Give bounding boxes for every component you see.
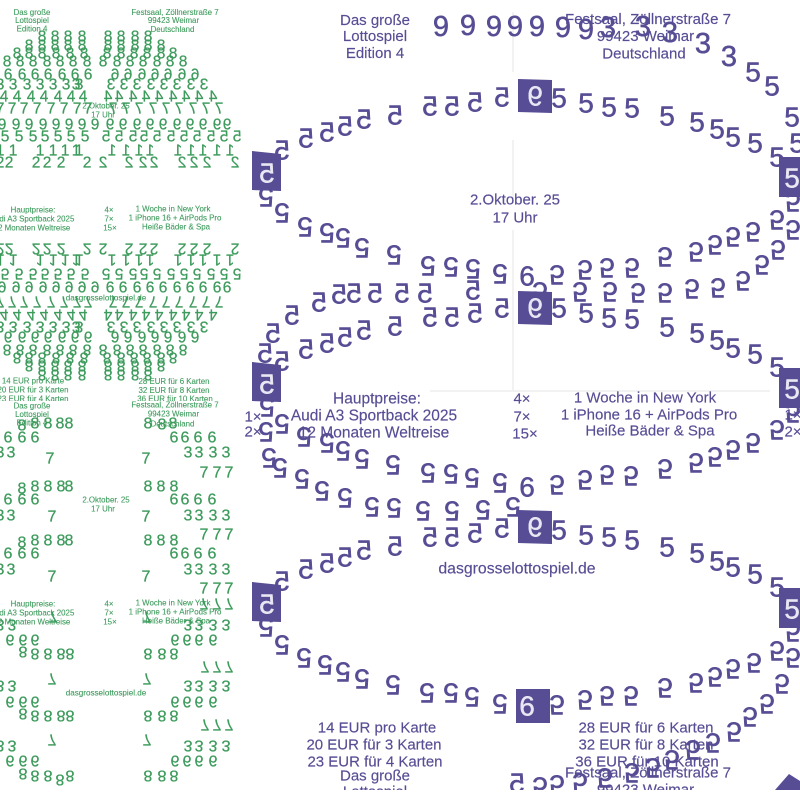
text: green venue xyxy=(131,8,219,34)
icon: cropped diamond box xyxy=(775,774,800,790)
chart: green digit columns, flipped: 77 xyxy=(48,730,152,748)
heading: green title repeat: Das große xyxy=(14,402,51,410)
chart: rotated fives on lower left arcs: 55555555555 xyxy=(258,612,508,720)
text: green ticket prices right xyxy=(137,377,213,404)
chart: green number dome, top left: 88888 xyxy=(25,38,86,54)
text: green ticket prices right: 36 EUR für 10 Karten xyxy=(137,394,213,404)
text: green prize counts: 4× xyxy=(104,206,114,214)
chart: green digit columns, upright: 6666666 xyxy=(4,430,217,446)
chart: green number dome, bottom right: 111111111 xyxy=(108,250,234,268)
text: green date repeat: 17 Uhr xyxy=(91,504,115,514)
chart: green number dome, bottom left: 5555555 xyxy=(1,264,89,282)
text: prize list: 1 iPhone 16 + AirPods Pro xyxy=(561,406,737,424)
chart: green number dome, bottom left: 8888 xyxy=(38,366,86,382)
chart: green digit columns, flipped: 333333 xyxy=(0,616,231,632)
chart: vertically flipped fives on lower right arcs: 555555555555 xyxy=(549,616,800,720)
text: green date: 2.Oktober. 25 xyxy=(82,102,130,110)
text: green venue repeat: Deutschland xyxy=(151,420,194,428)
chart: green number dome, bottom right: 8888888 xyxy=(99,340,187,358)
text: ticket prices left: 20 EUR für 3 Karten xyxy=(306,736,442,754)
heading: title: Das große xyxy=(340,12,410,29)
text: ticket prices right: 28 EUR für 6 Karten xyxy=(578,720,714,736)
chart: top row of nines and threes xyxy=(433,10,737,73)
text: venue repeat, cropped xyxy=(565,764,731,796)
heading: green title: Lottospiel xyxy=(15,16,49,25)
text: edge counts left: 1× xyxy=(244,408,262,426)
text: venue xyxy=(565,11,731,62)
chart: vertically flipped fives on lower right arcs: 555555555555 xyxy=(549,186,800,290)
chart: green number dome, top right: 33333333 xyxy=(107,76,208,94)
text: prize counts: 7× xyxy=(513,408,531,426)
chart: green digit columns, upright: 6666666 xyxy=(4,492,217,508)
chart: green digit columns, flipped: 888 xyxy=(144,644,179,662)
chart: green digit columns, upright: 888 xyxy=(144,416,178,434)
chart: green digit columns, flipped: 6666666 xyxy=(6,630,218,648)
text: ticket prices right: 36 EUR für 10 Karten xyxy=(575,754,719,770)
text: green ticket prices left xyxy=(0,376,69,404)
chart: green digit columns, upright: 88888 xyxy=(18,478,74,498)
heading: green title: Edition 4 xyxy=(17,24,48,34)
text: green prize counts: 15× xyxy=(103,224,117,232)
chart: right number boxes: 555 xyxy=(784,162,800,624)
text: main prizes xyxy=(291,390,457,442)
chart: green number dome, top left: 5555555 xyxy=(1,128,89,146)
chart: green number dome, bottom left: 4444444 xyxy=(0,306,88,322)
chart: green digit columns, upright: 77 xyxy=(48,568,151,586)
chart: green number dome, bottom left: 6666666 xyxy=(4,328,92,344)
chart: green number dome, bottom right: 777777777 xyxy=(109,292,223,310)
chart: vertically flipped fives on lower right arcs: 5555555555 xyxy=(532,234,786,308)
text: green prize list repeat: 1 Woche in New York xyxy=(136,598,210,608)
text: main prizes: Audi A3 Sportback 2025 xyxy=(291,408,457,424)
text: date: 2.Oktober. 25 xyxy=(470,192,560,208)
chart: green digit columns, upright xyxy=(0,416,234,598)
chart: green digit columns, upright: 77 xyxy=(46,450,151,468)
text: green prize list repeat xyxy=(129,598,222,626)
chart: rotated fives on lower left arcs xyxy=(258,182,521,720)
text: venue: Deutschland xyxy=(602,46,686,62)
chart: rotated fives on lower left arcs: 55555555555 xyxy=(259,392,508,498)
chart: green number dome, bottom right: 88888 xyxy=(104,356,165,374)
chart: green number dome, bottom right: 444444444 xyxy=(103,306,217,322)
text: ticket prices left xyxy=(306,720,443,770)
chart: vertically flipped fives on lower right arcs: 55555555555 xyxy=(549,398,800,500)
text: green prize list: 1 Woche in New York xyxy=(136,204,210,214)
text: main prizes: Hauptpreise: xyxy=(333,390,421,408)
chart: green digit columns, flipped: 888 xyxy=(144,766,179,784)
text: green website: dasgrosselottospiel.de xyxy=(66,294,147,302)
chart: green number dome, top left: 8888 xyxy=(38,28,86,46)
chart: green digit columns, flipped: 333333 xyxy=(0,676,231,694)
text: green prize list repeat: 1 iPhone 16 + AirPods Pro xyxy=(129,608,222,616)
chart: green digit columns, upright: 77 xyxy=(48,508,151,526)
chart: green number dome, top right xyxy=(99,28,241,172)
chart: green digit columns, upright: 6666666 xyxy=(4,546,217,562)
chart: green number dome, top left: 4444444 xyxy=(0,88,88,106)
heading: title: Lottospiel xyxy=(343,28,407,45)
text: green venue repeat xyxy=(131,400,219,428)
chart: green digit columns, upright: 888 xyxy=(144,532,179,550)
chart: upright fives on right arcs: 66 xyxy=(519,260,535,502)
heading: title repeat, cropped: Das große xyxy=(340,768,410,784)
chart: mirrored fives on left arcs: 5555555555 xyxy=(274,292,510,376)
text: green main prizes: Hauptpreise: xyxy=(11,206,55,214)
chart: green digit columns, upright: 333333 xyxy=(0,444,231,462)
text: green date repeat: 2.Oktober. 25 xyxy=(82,496,130,504)
text: green prize counts repeat xyxy=(103,600,117,626)
text: green website repeat: dasgrosselottospiel.de xyxy=(66,688,147,698)
chart: mirrored fives on left arcs xyxy=(257,82,525,796)
text: green date: 17 Uhr xyxy=(91,110,115,120)
chart: green number dome, bottom left xyxy=(0,240,99,382)
chart: green number dome, top right: 777777777 xyxy=(109,100,223,118)
text: ticket prices right: 32 EUR für 8 Karten xyxy=(578,736,714,754)
chart: green number dome, bottom left: 99999999 xyxy=(0,278,99,294)
text: venue: Festsaal, Zöllnerstraße 7 xyxy=(565,11,731,28)
text: green venue: 99423 Weimar xyxy=(148,16,199,25)
chart: mirrored fives on left arcs: 5555555555 xyxy=(257,274,481,368)
text: ticket prices left: 23 EUR für 4 Karten xyxy=(307,754,443,770)
heading: title repeat, cropped xyxy=(340,768,410,796)
chart: upright fives on right arcs: 5555555555 xyxy=(551,292,785,382)
chart: green digit columns, upright: 88888 xyxy=(18,416,74,434)
text: green ticket prices right: 28 EUR für 6 Karten xyxy=(138,377,210,386)
chart: upright fives on right arcs: 5555555555 xyxy=(551,514,785,602)
text: green main prizes repeat: Hauptpreise: xyxy=(11,600,55,608)
text: prize list: Heiße Bäder & Spa xyxy=(585,422,715,440)
chart: green number dome, top right: 22222222 xyxy=(99,154,239,172)
chart: centre number boxes: 666 xyxy=(527,80,543,542)
text: green venue repeat: Festsaal, Zöllnerstraße 7 xyxy=(131,400,219,410)
chart: green digit columns, flipped: 777 xyxy=(201,716,234,732)
chart: green digit columns, upright: 777 xyxy=(200,526,234,544)
chart: green number dome, top right: 55555555555 xyxy=(102,128,241,146)
chart: green digit columns, flipped: 333333 xyxy=(0,736,231,754)
chart: green number dome, top right: 111111111 xyxy=(108,142,234,160)
text: green main prizes xyxy=(0,206,75,232)
chart: centre number boxes xyxy=(518,79,552,544)
chart: green digit columns, flipped: 77 xyxy=(48,670,152,686)
text: date: 17 Uhr xyxy=(492,210,538,226)
text: ticket prices left: 14 EUR pro Karte xyxy=(318,720,436,736)
chart: left number boxes: 555 xyxy=(259,158,275,620)
chart: green digit columns, upright: 333333 xyxy=(0,508,231,524)
text: green prize counts repeat: 4× xyxy=(104,600,114,608)
text: edge counts right xyxy=(784,406,800,440)
heading: green title repeat: Lottospiel xyxy=(15,410,49,419)
chart: green number dome, top right: 444444444 xyxy=(103,88,217,106)
chart: green number dome, top left xyxy=(0,28,99,172)
text: date xyxy=(470,192,560,226)
chart: green number dome, top right: 8888888 xyxy=(99,54,187,70)
chart: green digit columns, flipped: 6666666 xyxy=(6,692,218,710)
chart: green digit columns, flipped: 88888 xyxy=(19,704,75,724)
text: prize counts xyxy=(512,390,538,442)
text: prize counts: 4× xyxy=(513,390,531,408)
chart: green number dome, bottom right: 8888 xyxy=(104,366,152,382)
chart: rotated fives on lower left arcs: 55555555555 xyxy=(258,182,508,290)
chart: green digit columns, upright: 888 xyxy=(144,478,179,496)
text: ticket prices right xyxy=(575,720,719,770)
chart: green number dome, top right: 888888 xyxy=(103,46,177,62)
chart: green digit columns, upright: 88888 xyxy=(18,532,74,552)
text: prize counts: 15× xyxy=(512,426,538,442)
chart: green digit columns, flipped: 88888 xyxy=(19,642,75,662)
chart: upright fives on right arcs: 5555555555 xyxy=(551,82,785,172)
chart: green digit columns, flipped: 77 xyxy=(49,608,152,624)
text: green main prizes repeat xyxy=(0,600,75,626)
chart: rotated fives on lower left arcs: 555555555555 xyxy=(258,416,521,526)
chart: green number dome, bottom right: 22222222 xyxy=(99,240,239,256)
text: green prize counts xyxy=(103,206,117,232)
text: edge counts left xyxy=(244,408,262,440)
text: website: dasgrosselottospiel.de xyxy=(438,560,596,578)
text: green prize list: 1 iPhone 16 + AirPods Pro xyxy=(129,214,222,222)
heading: green title xyxy=(14,8,51,34)
chart: bottom number box xyxy=(516,689,550,723)
chart: green digit columns, upright: 777 xyxy=(200,580,234,598)
text: green prize list: Heiße Bäder & Spa xyxy=(142,222,211,232)
chart: green number dome, top left: 99999999 xyxy=(0,116,99,134)
chart: green number dome, bottom right: 6666666 xyxy=(111,328,199,344)
chart: top row of nines and threes: 33333 xyxy=(600,11,737,73)
text: green venue: Festsaal, Zöllnerstraße 7 xyxy=(131,8,219,17)
chart: green digit columns, upright: 777 xyxy=(200,464,234,482)
chart: left number boxes xyxy=(252,151,281,622)
chart: green number dome, top right: 88888 xyxy=(104,38,165,54)
heading: title: Edition 4 xyxy=(346,45,404,62)
chart: green digit columns, flipped: 88888 xyxy=(19,764,75,788)
chart: green digit columns, flipped: 777 xyxy=(201,658,234,674)
chart: green digit columns, upright: 333333 xyxy=(0,562,231,578)
heading: title xyxy=(340,12,410,62)
chart: green number dome, bottom right: 9999999999 xyxy=(106,278,231,294)
chart: green digit columns, flipped: 888 xyxy=(144,706,179,724)
text: prize list xyxy=(561,390,737,440)
chart: green number dome, top right: 8888 xyxy=(104,28,152,46)
panel: purple large poster xyxy=(244,10,800,796)
text: green prize counts repeat: 7× xyxy=(104,608,114,618)
heading: green title repeat xyxy=(14,402,51,428)
text: green date xyxy=(82,102,130,120)
chart: green number dome, bottom left: 888888 xyxy=(13,348,88,366)
chart: mirrored fives on left arcs: 5555555555 xyxy=(274,82,510,166)
chart: vertically flipped fives on lower right arcs xyxy=(532,186,800,796)
text: prize list: 1 Woche in New York xyxy=(574,390,717,406)
chart: green number dome, top left: 6666666 xyxy=(4,66,92,84)
chart: green number dome, bottom right xyxy=(99,240,241,382)
chart: upright fives on right arcs xyxy=(519,56,800,602)
text: venue repeat, cropped: Festsaal, Zöllnerstraße 7 xyxy=(565,764,731,782)
chart: green number dome, top right: 6666666 xyxy=(111,66,199,84)
chart: green number dome, bottom right: 55555555555 xyxy=(102,264,241,282)
text: green date repeat xyxy=(82,496,130,514)
text: green ticket prices left: 14 EUR pro Karte xyxy=(2,376,65,386)
chart: green number dome, bottom right: 33333333 xyxy=(107,318,208,334)
chart: green number dome, bottom left: 8888888 xyxy=(3,340,91,358)
text: edge counts left: 2× xyxy=(244,424,262,440)
text: green prize list xyxy=(129,204,222,232)
text: venue: 99423 Weimar xyxy=(597,28,694,45)
text: green venue repeat: 99423 Weimar xyxy=(148,410,199,418)
heading: green title repeat: Edition 4 xyxy=(17,418,48,428)
chart: mirrored fives on left arcs: 5555555555 xyxy=(274,512,510,596)
text: green prize list repeat: Heiße Bäder & Spa xyxy=(142,616,211,626)
text: green prize counts repeat: 15× xyxy=(103,618,117,626)
chart: green number dome, top right: 9999999999 xyxy=(106,116,231,134)
chart: green digit columns, flipped: 6666666 xyxy=(6,752,218,768)
chart: green digit columns, flipped xyxy=(0,594,234,788)
chart: green digit columns, flipped: 777 xyxy=(200,594,234,612)
chart: bottom number box: 6 xyxy=(519,690,535,722)
chart: green number dome, bottom left: 88888 xyxy=(25,356,86,374)
chart: top row of nines and threes: 9999999 xyxy=(433,10,594,46)
text: green venue: Deutschland xyxy=(151,25,194,34)
panel: green small poster xyxy=(0,8,245,788)
text: main prizes: 12 Monaten Weltreise xyxy=(299,424,449,442)
heading: green title: Das große xyxy=(14,8,51,17)
text: green prize counts: 7× xyxy=(104,214,114,224)
chart: green number dome, top left: 8888888 xyxy=(3,54,91,70)
text: green ticket prices right: 32 EUR für 8 Karten xyxy=(138,386,210,395)
chart: green number dome, top left: 888888 xyxy=(13,46,88,62)
chart: green number dome, bottom right: 888888 xyxy=(103,348,177,366)
